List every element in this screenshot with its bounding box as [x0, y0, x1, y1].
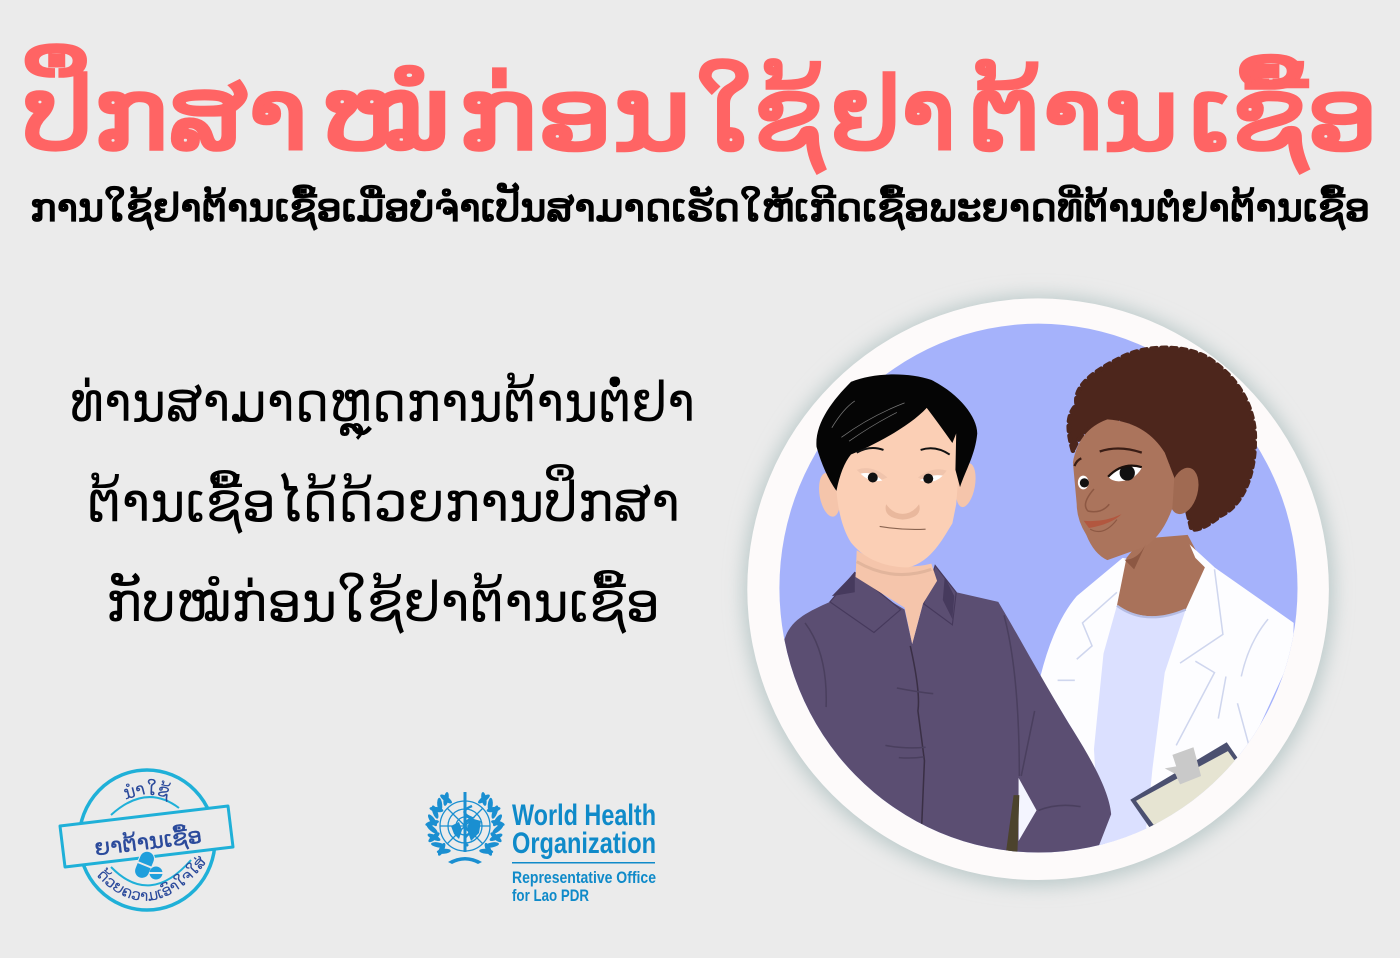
- logo: WHO emblem: [425, 792, 505, 864]
- hair: [1069, 348, 1255, 529]
- main message: ທ່ານສາມາດຫຼຸດການຕ້ານຕໍ່ຢາ: [70, 371, 695, 440]
- title: ຕ້ານ: [968, 56, 1179, 173]
- ears: [816, 471, 843, 518]
- logo: WHO wordmark: Representative Office: [512, 868, 656, 887]
- face: [1073, 419, 1174, 560]
- logo: WHO wordmark: World Health: [512, 799, 656, 832]
- face: [836, 405, 959, 567]
- logo: WHO wordmark: Organization: [512, 827, 656, 860]
- title: ໃຊ້: [696, 56, 826, 173]
- main message: [70, 371, 695, 634]
- logo: WHO wordmark: [512, 799, 656, 905]
- logo: WHO wordmark: for Lao PDR: [512, 886, 589, 905]
- ear: [1164, 464, 1203, 517]
- main message: ຕ້ານເຊື້ອໄດ້ດ້ວຍການປຶກສາ: [87, 465, 680, 534]
- hair: [816, 374, 977, 491]
- illustration: patient and doctor in circle: [743, 295, 1334, 886]
- doctor: [1040, 348, 1294, 856]
- title: [23, 44, 1378, 173]
- title: ປຶກສາ: [23, 44, 308, 173]
- main message: ກັບໝໍກ່ອນໃຊ້ຢາຕ້ານເຊື້ອ: [106, 570, 660, 634]
- logo: antibiotics campaign stamp: ຍາຕ້ານເຊື້ອ: [93, 822, 203, 861]
- logo: antibiotics campaign stamp: [58, 768, 234, 912]
- logo: antibiotics campaign stamp: ນຳໃຊ້: [124, 778, 171, 802]
- title: ໝໍ: [320, 56, 450, 173]
- logo: antibiotics campaign stamp: ດ້ວຍຄວາມເອົາໃຈໃສ່: [98, 856, 206, 901]
- patient: [771, 374, 1111, 860]
- subtitle: ການໃຊ້ຢາຕ້ານເຊື້ອເມື່ອບໍ່ຈຳເປັນສາມາດເຮັດໃຫ້ເກີດເຊື້ອພະຍາດທີ່ຕ້ານຕໍ່ຢາຕ້ານເຊື້ອ: [30, 183, 1370, 230]
- title: ກ່ອນ: [458, 56, 691, 173]
- title: ຢາ: [830, 56, 956, 173]
- title: ເຊື້ອ: [1189, 55, 1378, 173]
